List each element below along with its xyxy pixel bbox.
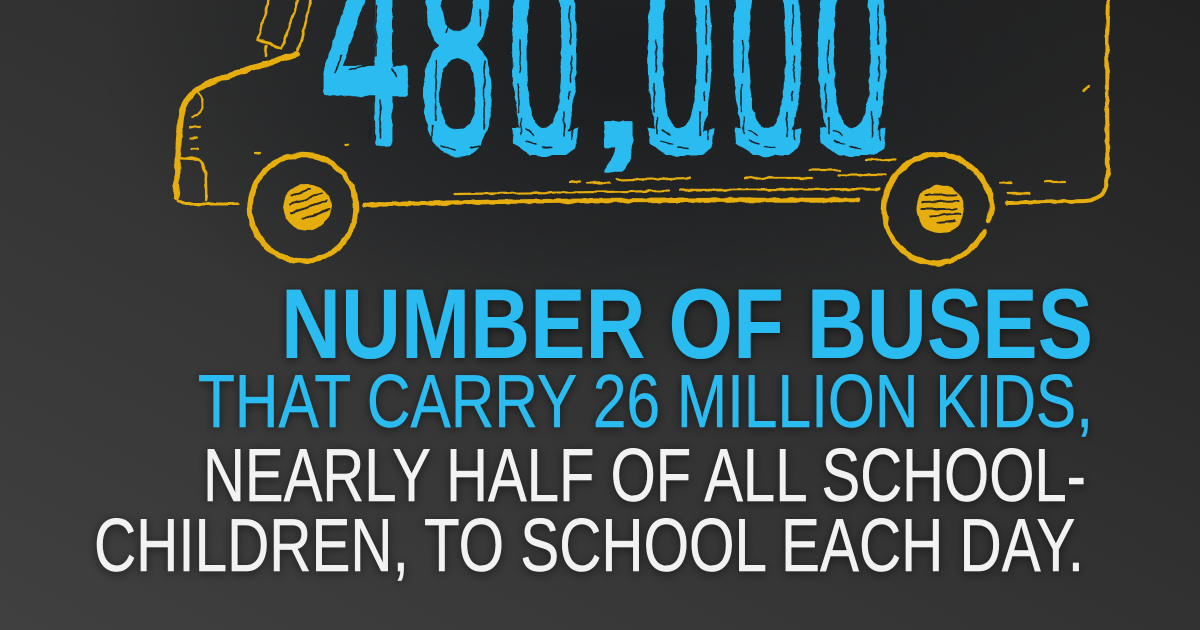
front hub <box>283 184 331 230</box>
bus hood and front <box>176 54 297 197</box>
front bumper <box>178 158 238 204</box>
chalk texture on digits <box>334 6 886 155</box>
headlight <box>192 93 203 117</box>
rear of bus <box>1007 0 1108 203</box>
chalk streaks <box>190 87 1088 194</box>
rear hub <box>916 185 964 233</box>
headline <box>94 268 1093 587</box>
body underline <box>364 200 858 205</box>
rear wheel <box>884 154 992 263</box>
big number 480,000 <box>322 0 890 213</box>
school bus chalk drawing <box>176 0 1108 263</box>
front wheel <box>250 155 356 261</box>
windshield and window frame <box>258 0 310 56</box>
big number 480,000: , <box>593 4 643 180</box>
